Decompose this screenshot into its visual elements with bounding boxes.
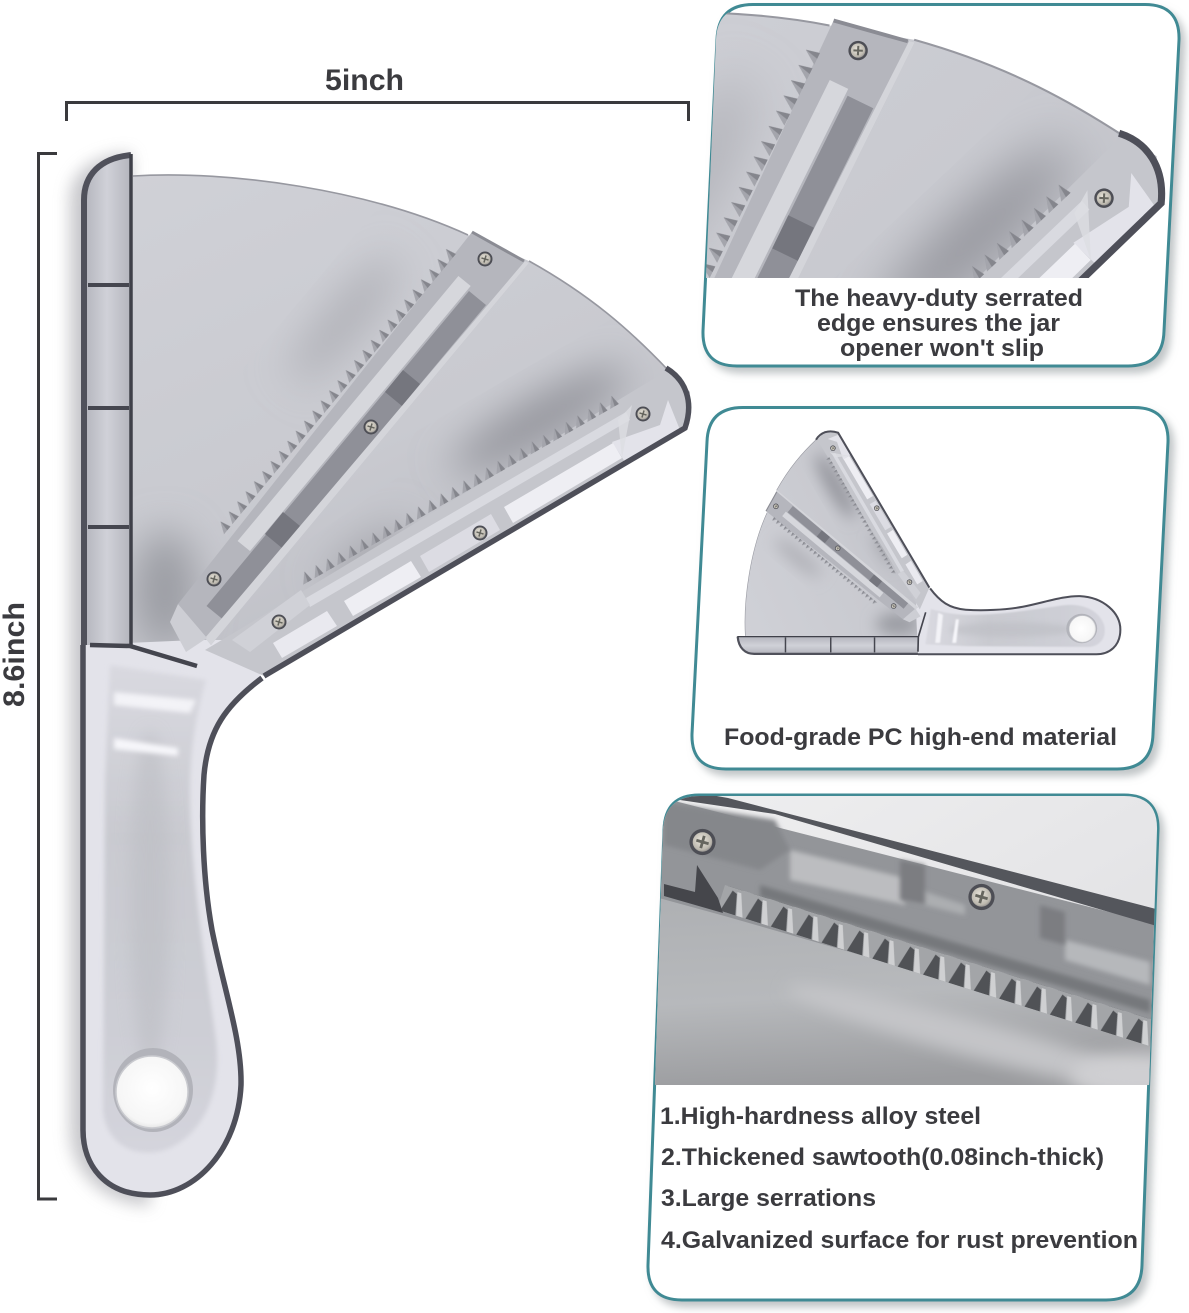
junction bar [90,645,197,666]
panel 3 feature list [660,1103,1138,1254]
panel: material [692,408,1168,769]
fan disc [125,165,695,685]
panel 1 caption: edge ensures the jar [817,310,1060,337]
panel 3 frame [648,795,1158,1300]
label: 5inch: 5inch [325,64,404,97]
panel 2 caption: Food-grade PC high-end material [724,724,1117,751]
dark notch [664,865,723,913]
main product shadow [70,153,150,1206]
translucent housing [660,802,1154,1030]
panel: blade close-up [648,785,1189,1300]
blade 1 serrated teeth [214,247,456,536]
panel 2 rotated product photo [737,429,1120,654]
left ribbed strip [83,154,131,646]
blade 2 lower band [205,370,690,676]
lower disc surface [655,897,1160,1090]
dimension: height bracket [0,154,57,1199]
screws [206,252,650,630]
panel 1 caption [795,285,1083,362]
panel 3 feature list: 2.Thickened sawtooth(0.08inch-thick) [661,1144,1104,1171]
blade 1 band [170,232,529,652]
panel 2 frame [692,408,1168,769]
dimension: width bracket [66,64,688,121]
dark top rim [680,796,1154,926]
panel 3 macro photo of saw teeth [655,796,1158,1085]
panel 3 feature list: 3.Large serrations [661,1185,876,1212]
panel: serrated edge [701,3,1189,378]
saw teeth row [717,885,1164,1048]
blade 2 serrated teeth [296,394,619,586]
panel 3 feature list: 4.Galvanized surface for rust prevention [661,1227,1138,1254]
handle hanging hole [113,1048,193,1132]
main product photo: jar opener [83,154,695,1195]
screws [689,829,995,910]
panel 1 frame [703,4,1179,366]
panel 1 close-up photo [706,12,1166,278]
panel 3 feature list: 1.High-hardness alloy steel [660,1103,981,1130]
panel 1 caption: opener won't slip [840,335,1044,362]
panel 1 caption: The heavy-duty serrated [795,285,1083,312]
handle [83,640,262,1195]
lobe and outer edge [264,368,689,676]
